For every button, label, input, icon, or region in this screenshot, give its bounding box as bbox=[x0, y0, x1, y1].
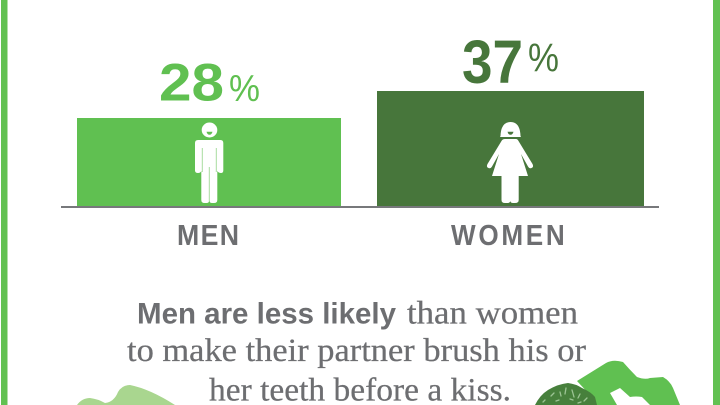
caption text bbox=[127, 296, 586, 405]
value: men 28%: % bbox=[229, 68, 260, 109]
caption text: Men are less likely bbox=[137, 298, 397, 330]
right page border bbox=[713, 0, 720, 405]
caption text: to make their partner brush his or bbox=[127, 333, 586, 369]
label: men: MEN bbox=[177, 219, 240, 251]
value: women 37%: 37 bbox=[462, 28, 523, 96]
value: women 37% bbox=[462, 28, 559, 96]
chart baseline bbox=[61, 206, 659, 208]
icon: woman bbox=[487, 122, 533, 203]
bar chart: men vs women bbox=[61, 28, 659, 251]
left page border bbox=[1, 0, 8, 405]
bar: women bbox=[377, 91, 644, 207]
caption text: than women bbox=[407, 296, 578, 332]
value: men 28% bbox=[159, 54, 260, 112]
label: women: WOMEN bbox=[451, 219, 567, 251]
icon: man bbox=[195, 122, 223, 203]
bar: men bbox=[77, 118, 341, 207]
value: men 28%: 28 bbox=[159, 54, 224, 112]
illustration: dark green speckled lips bbox=[535, 383, 597, 405]
illustration: green lips with white tooth bbox=[577, 361, 680, 405]
illustration: light green shape bbox=[77, 385, 175, 405]
value: women 37%: % bbox=[528, 36, 559, 80]
